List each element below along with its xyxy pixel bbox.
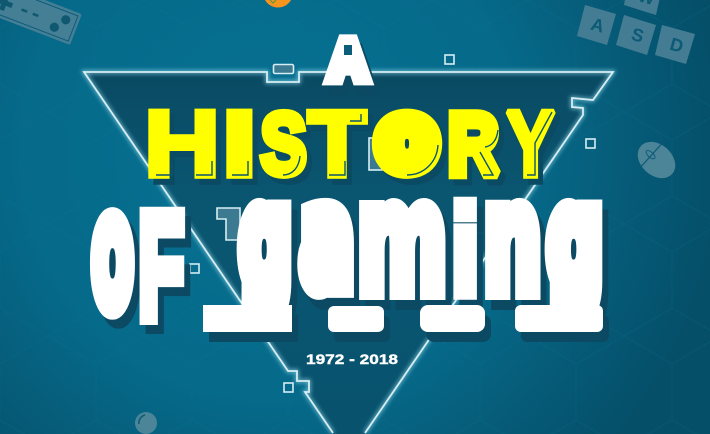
word: gaming: m bbox=[357, 151, 447, 327]
icon: game controller bbox=[0, 0, 82, 45]
glow: triangle outline bbox=[84, 72, 613, 433]
word: HISTORY: O bbox=[381, 107, 433, 182]
icon: keyboard keys: A bbox=[589, 14, 607, 37]
icon: marble bbox=[135, 412, 157, 434]
word: HISTORY: T bbox=[308, 92, 366, 197]
word: HISTORY: Y bbox=[506, 91, 555, 196]
word: gaming: n bbox=[484, 155, 541, 324]
word: gaming: i bbox=[448, 180, 482, 326]
word: HISTORY: R bbox=[448, 96, 499, 192]
word: gaming: a bbox=[300, 158, 354, 320]
yellow letter inner lines bbox=[156, 112, 552, 175]
word: gaming: g bbox=[239, 157, 292, 323]
word: OF bbox=[93, 183, 184, 350]
small glowing shapes bbox=[190, 55, 595, 392]
word: HISTORY: S bbox=[261, 96, 306, 193]
word: gaming: g bbox=[547, 157, 603, 324]
word: gaming bbox=[203, 151, 603, 332]
icon: keyboard keys: D bbox=[668, 34, 686, 57]
word: HISTORY: H bbox=[144, 91, 220, 196]
triangle outline bbox=[84, 72, 613, 433]
letter A: A bbox=[329, 30, 367, 91]
triangle fill bbox=[84, 72, 613, 434]
word: OF: F bbox=[138, 183, 184, 350]
date range: 1972 - 2018 bbox=[306, 352, 399, 367]
icon: orange coin bbox=[265, 0, 291, 8]
letter A counter bbox=[344, 45, 352, 55]
icon: keyboard keys: S bbox=[629, 24, 646, 47]
word: HISTORY: I bbox=[222, 92, 257, 196]
icon: keyboard keys bbox=[577, 0, 695, 64]
word: HISTORY bbox=[144, 91, 555, 197]
word: OF: O bbox=[93, 198, 132, 333]
icon: computer mouse bbox=[631, 134, 682, 186]
